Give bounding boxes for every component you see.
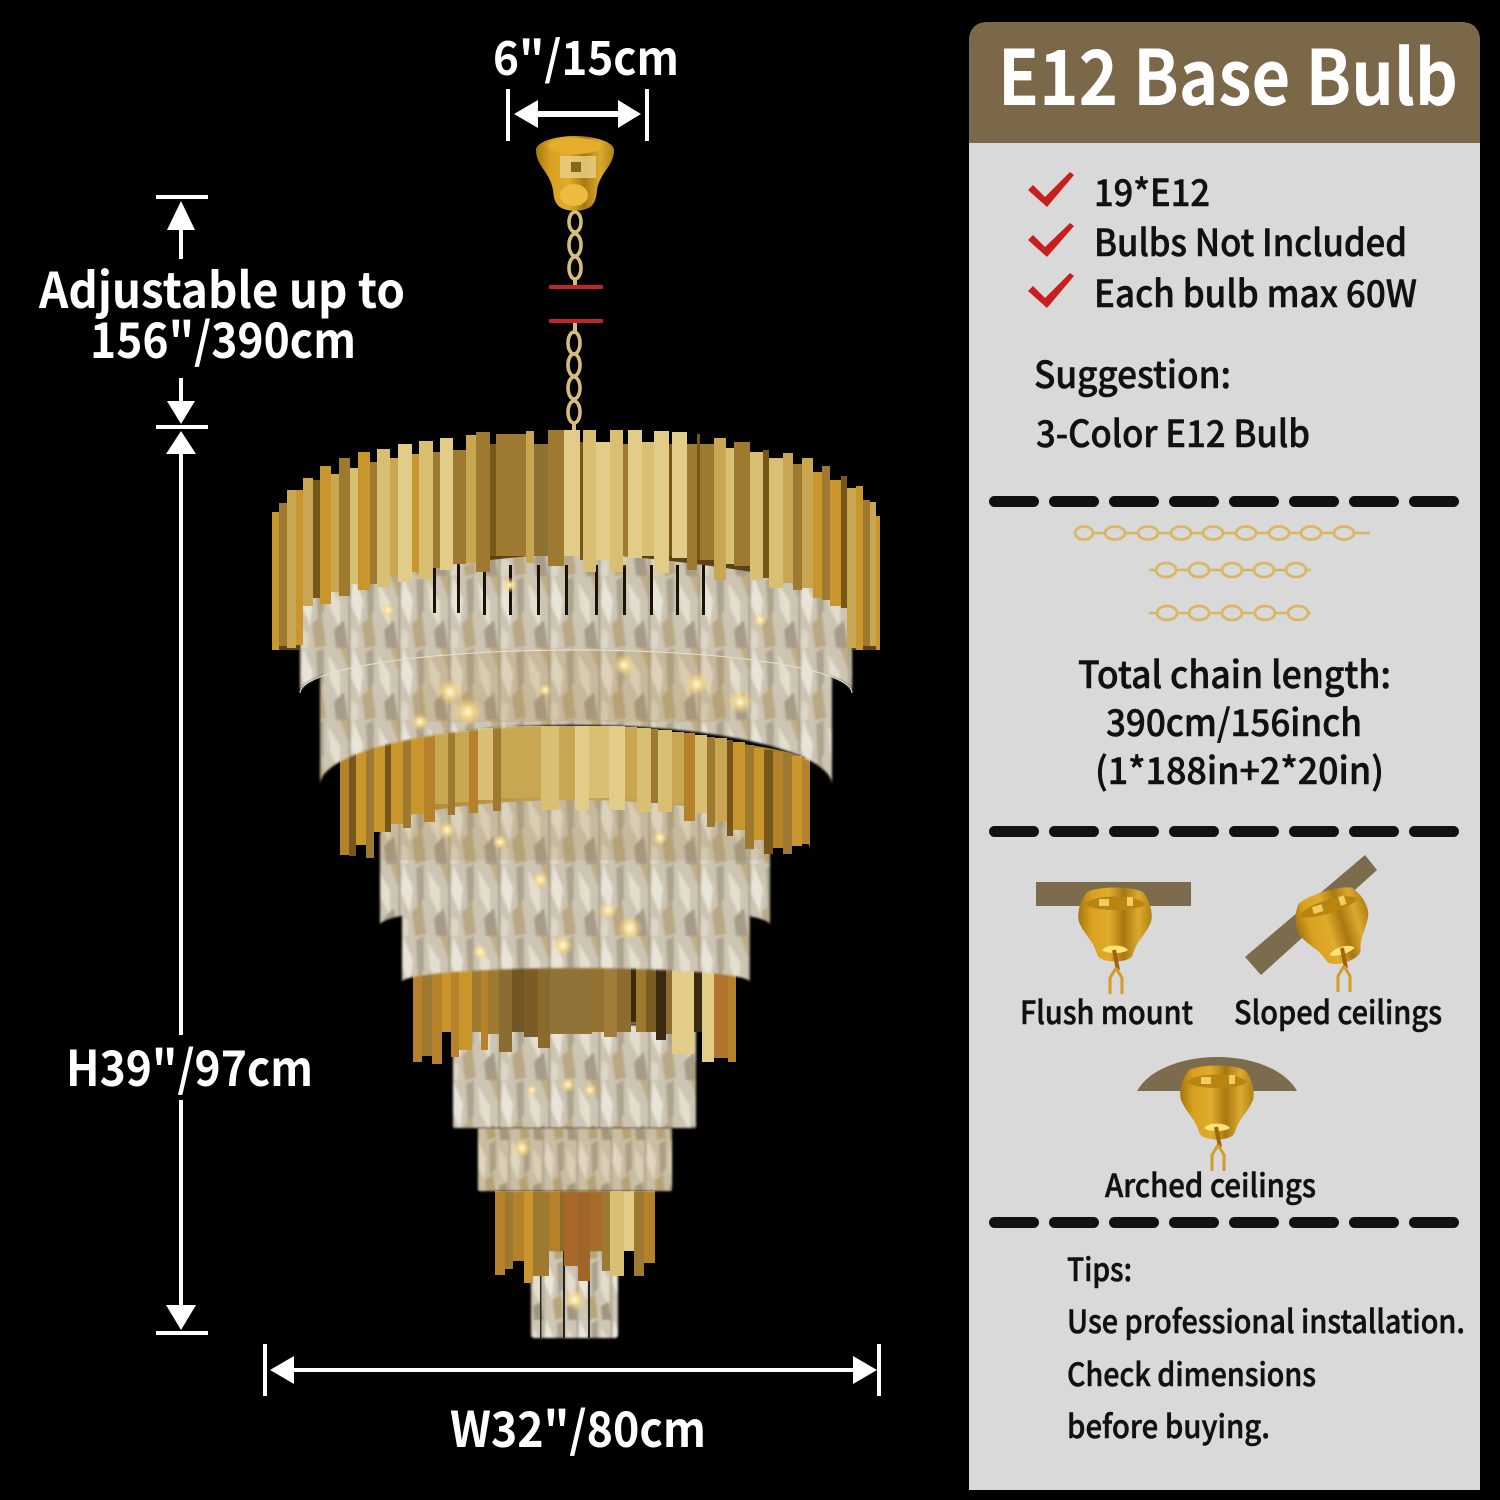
crystal tier 1 <box>300 544 852 693</box>
chandelier <box>272 136 880 1338</box>
gold tier 1 <box>272 430 880 650</box>
feature list: Bulbs Not Included <box>1094 213 1407 267</box>
gold tier 2 <box>340 726 810 858</box>
crystal tier 5 <box>453 1025 696 1128</box>
gold tier 3 <box>413 962 736 1064</box>
divider 2 <box>989 826 1459 837</box>
chain length text: Total chain length: <box>1078 645 1391 699</box>
dimension: height: H39"/97cm <box>66 1030 313 1101</box>
icon: flush mount: Flush mount <box>1020 988 1193 1034</box>
dimension: canopy width: 6"/15cm <box>493 20 679 89</box>
dimension: adjustable chain length: 156"/390cm <box>90 302 356 373</box>
chain length text: (1*188in+2*20in) <box>1095 741 1384 795</box>
icon: sloped ceilings: Sloped ceilings <box>1234 988 1442 1034</box>
icon: long chain <box>1075 526 1370 540</box>
icon: short chain 1 <box>1149 563 1311 577</box>
tips: Use professional installation. <box>1067 1297 1465 1343</box>
dimension: adjustable chain length: Adjustable up to <box>38 252 405 323</box>
tips: Tips: <box>1067 1245 1132 1291</box>
gold tier 4 <box>495 1191 655 1283</box>
divider 3 <box>989 1217 1459 1228</box>
dimension: width <box>263 1344 881 1462</box>
dimension: height <box>66 425 313 1335</box>
divider 1 <box>989 496 1459 507</box>
suggestion <box>1034 345 1310 458</box>
canopy and chain <box>536 136 614 434</box>
dimension: canopy width <box>493 20 679 141</box>
crystal tier 7 <box>531 1250 618 1338</box>
dimension: adjustable chain length <box>38 195 405 424</box>
chain length text: 390cm/156inch <box>1106 693 1362 747</box>
crystal tier 3 <box>380 795 770 925</box>
icon: short chain 2 <box>1149 606 1311 620</box>
icon: sloped ceilings <box>1234 855 1442 1034</box>
feature list <box>1028 163 1417 318</box>
tips: before buying. <box>1067 1402 1270 1448</box>
panel: specifications <box>969 17 1480 1490</box>
red chain break marks <box>549 285 603 323</box>
feature list: 19*E12 <box>1094 163 1210 217</box>
panel background <box>969 22 1480 1490</box>
dimension: width: W32"/80cm <box>450 1391 706 1462</box>
suggestion: Suggestion: <box>1034 345 1231 399</box>
tips: Check dimensions <box>1067 1350 1316 1396</box>
crystal tier 4 <box>402 900 750 982</box>
feature list: Each bulb max 60W <box>1094 264 1417 318</box>
icon: flush mount <box>1020 882 1193 1034</box>
crystal tier 2 <box>320 640 832 785</box>
chain length text <box>1078 645 1391 795</box>
icon: arched ceilings: Arched ceilings <box>1105 1161 1316 1207</box>
tips <box>1067 1245 1465 1448</box>
suggestion: 3-Color E12 Bulb <box>1036 404 1310 458</box>
crystal tier 6 <box>478 1128 672 1191</box>
icon: arched ceilings <box>1105 1057 1316 1207</box>
